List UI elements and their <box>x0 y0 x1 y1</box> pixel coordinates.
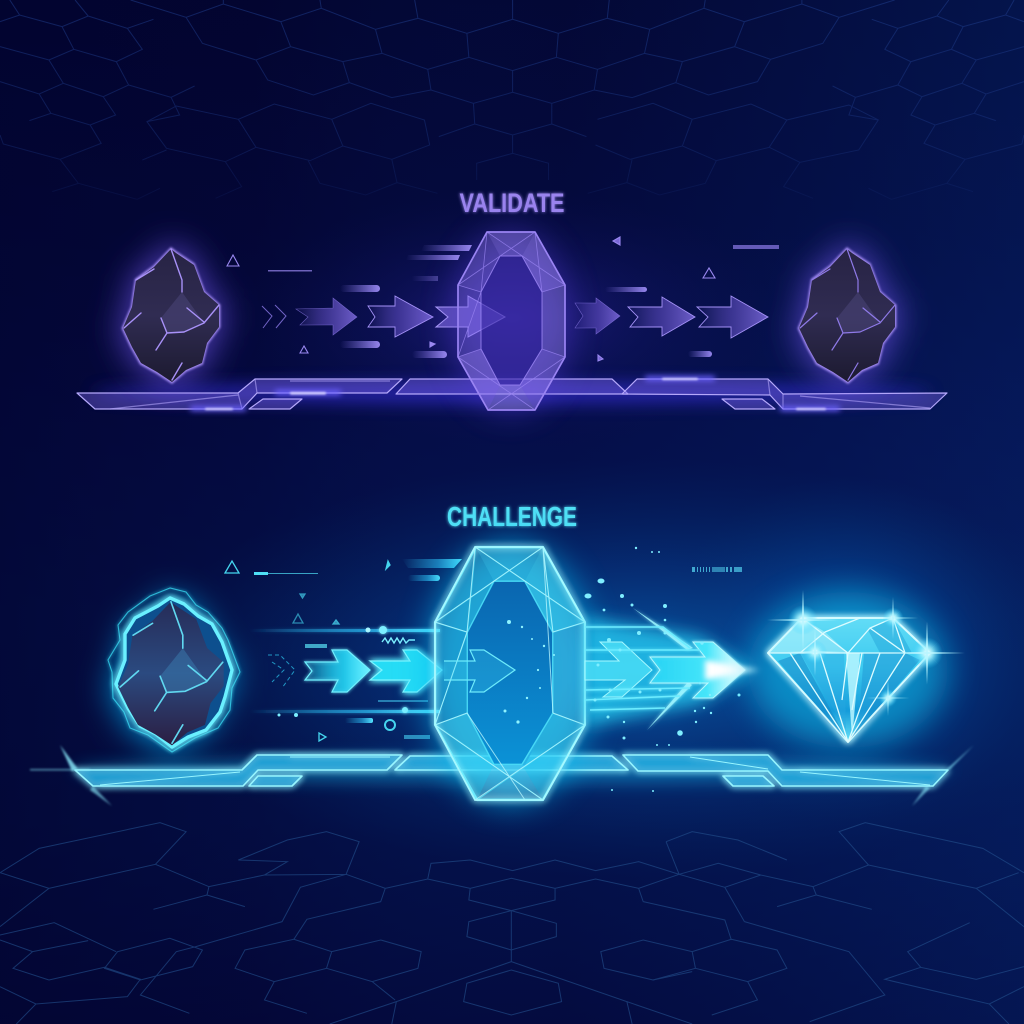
data streaks: challenge <box>250 559 462 739</box>
shapes: challenge glyphs <box>225 561 395 741</box>
arrows: validate left side <box>262 296 505 337</box>
rock cracks <box>120 602 223 743</box>
flares: platform ends <box>30 745 974 806</box>
shapes: validate triangles <box>227 237 715 361</box>
rock body <box>118 602 224 745</box>
diamond <box>748 592 948 748</box>
rock facet <box>160 648 207 692</box>
lightning: outer arcs <box>108 588 240 752</box>
sparkles: diamond <box>767 590 965 716</box>
portal: validate <box>451 229 571 413</box>
panel: validate row <box>77 188 947 413</box>
particles: challenge burst <box>584 547 740 792</box>
arrows: validate right side <box>575 296 768 338</box>
heading: CHALLENGE: CHALLENGE <box>447 501 577 532</box>
arrows: challenge left side <box>268 650 442 692</box>
portal: challenge <box>426 541 594 805</box>
data bar: upper right <box>692 567 742 572</box>
sparks: inside portal <box>504 620 555 724</box>
lightning: inner halo <box>116 598 232 747</box>
hexagon grid: bottom <box>0 823 1024 1024</box>
rock: challenge with lightning <box>108 588 240 755</box>
platform: challenge <box>72 755 952 786</box>
data streaks: validate <box>268 245 779 358</box>
heading: VALIDATE: VALIDATE <box>460 188 564 218</box>
hexagon grid: top <box>0 0 1024 199</box>
platform: validate <box>77 376 947 411</box>
burst: challenge output arrows <box>585 608 760 730</box>
rock: right validate <box>793 241 901 390</box>
panel: challenge row <box>30 501 974 806</box>
rock: left validate <box>117 241 225 390</box>
